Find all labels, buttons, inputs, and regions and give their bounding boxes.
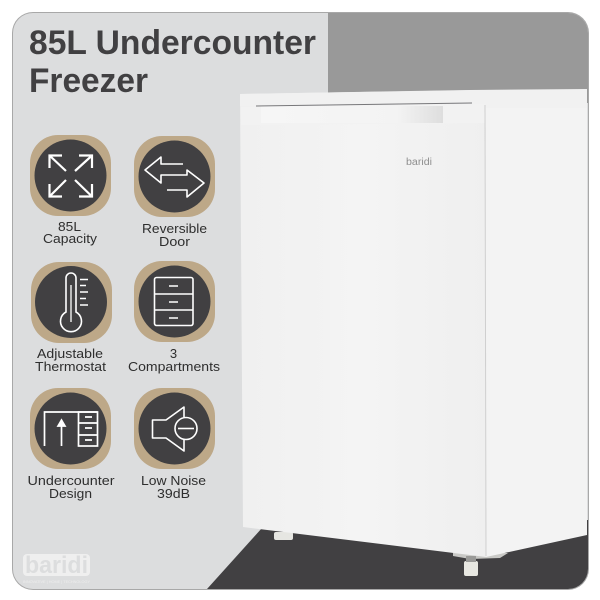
door top band bbox=[241, 104, 485, 125]
icon: expand arrows bbox=[50, 156, 92, 196]
feature: 85L capacity bbox=[30, 135, 111, 246]
foot: front bbox=[453, 553, 508, 576]
label: 3 Compartments bbox=[128, 346, 221, 374]
label: Undercounter Design bbox=[28, 473, 115, 501]
label: Low Noise 39dB: 39dB bbox=[157, 486, 190, 501]
freezer front door bbox=[240, 90, 486, 557]
label: 3 Compartments: 3 bbox=[170, 346, 177, 361]
freezer side bbox=[485, 89, 587, 557]
door handle recess bbox=[417, 106, 443, 123]
label: Undercounter Design: Undercounter bbox=[28, 473, 115, 488]
label: Adjustable Thermostat bbox=[35, 346, 106, 374]
icon: counter with drawers bbox=[44, 412, 98, 446]
brand logo: baridi bbox=[25, 552, 88, 579]
feature: adjustable thermostat bbox=[31, 262, 112, 374]
brand badge: baridi bbox=[406, 157, 432, 168]
panel: dark floor bbox=[207, 520, 588, 589]
door gap bbox=[256, 103, 472, 106]
brand logo: INNOVATIVE | HOME | TECHNOLOGY bbox=[23, 580, 91, 584]
icon: drawers bbox=[154, 278, 193, 326]
label: Low Noise 39dB: Low Noise bbox=[141, 473, 206, 488]
freezer product image bbox=[240, 89, 587, 576]
label: 85L Capacity bbox=[43, 219, 98, 246]
feature: reversible door bbox=[134, 136, 215, 249]
icon: opposing arrows bbox=[145, 157, 204, 197]
title bbox=[29, 24, 316, 100]
label: 3 Compartments: Compartments bbox=[128, 359, 221, 374]
label: Adjustable Thermostat: Adjustable bbox=[37, 346, 103, 361]
feature: low noise bbox=[134, 388, 215, 501]
title: 85L Undercounter bbox=[29, 24, 316, 62]
label: Low Noise 39dB bbox=[141, 473, 206, 501]
label: Reversible Door: Reversible bbox=[142, 221, 207, 236]
feature: undercounter design bbox=[28, 388, 115, 501]
foot: rear bbox=[274, 532, 293, 540]
feature: 3 compartments bbox=[128, 261, 221, 374]
label: Reversible Door: Door bbox=[159, 234, 191, 249]
label: Adjustable Thermostat: Thermostat bbox=[35, 359, 106, 374]
freezer top bbox=[328, 89, 586, 96]
icon: thermometer bbox=[60, 273, 88, 332]
icon: speaker with minus bbox=[152, 407, 197, 451]
label: 85L Capacity: Capacity bbox=[43, 231, 98, 246]
label: Reversible Door bbox=[142, 221, 207, 249]
label: Undercounter Design: Design bbox=[49, 486, 92, 501]
label: 85L Capacity: 85L bbox=[58, 219, 81, 234]
title: Freezer bbox=[29, 62, 148, 100]
door edge bbox=[485, 105, 486, 556]
panel: grey wall bbox=[328, 13, 588, 103]
